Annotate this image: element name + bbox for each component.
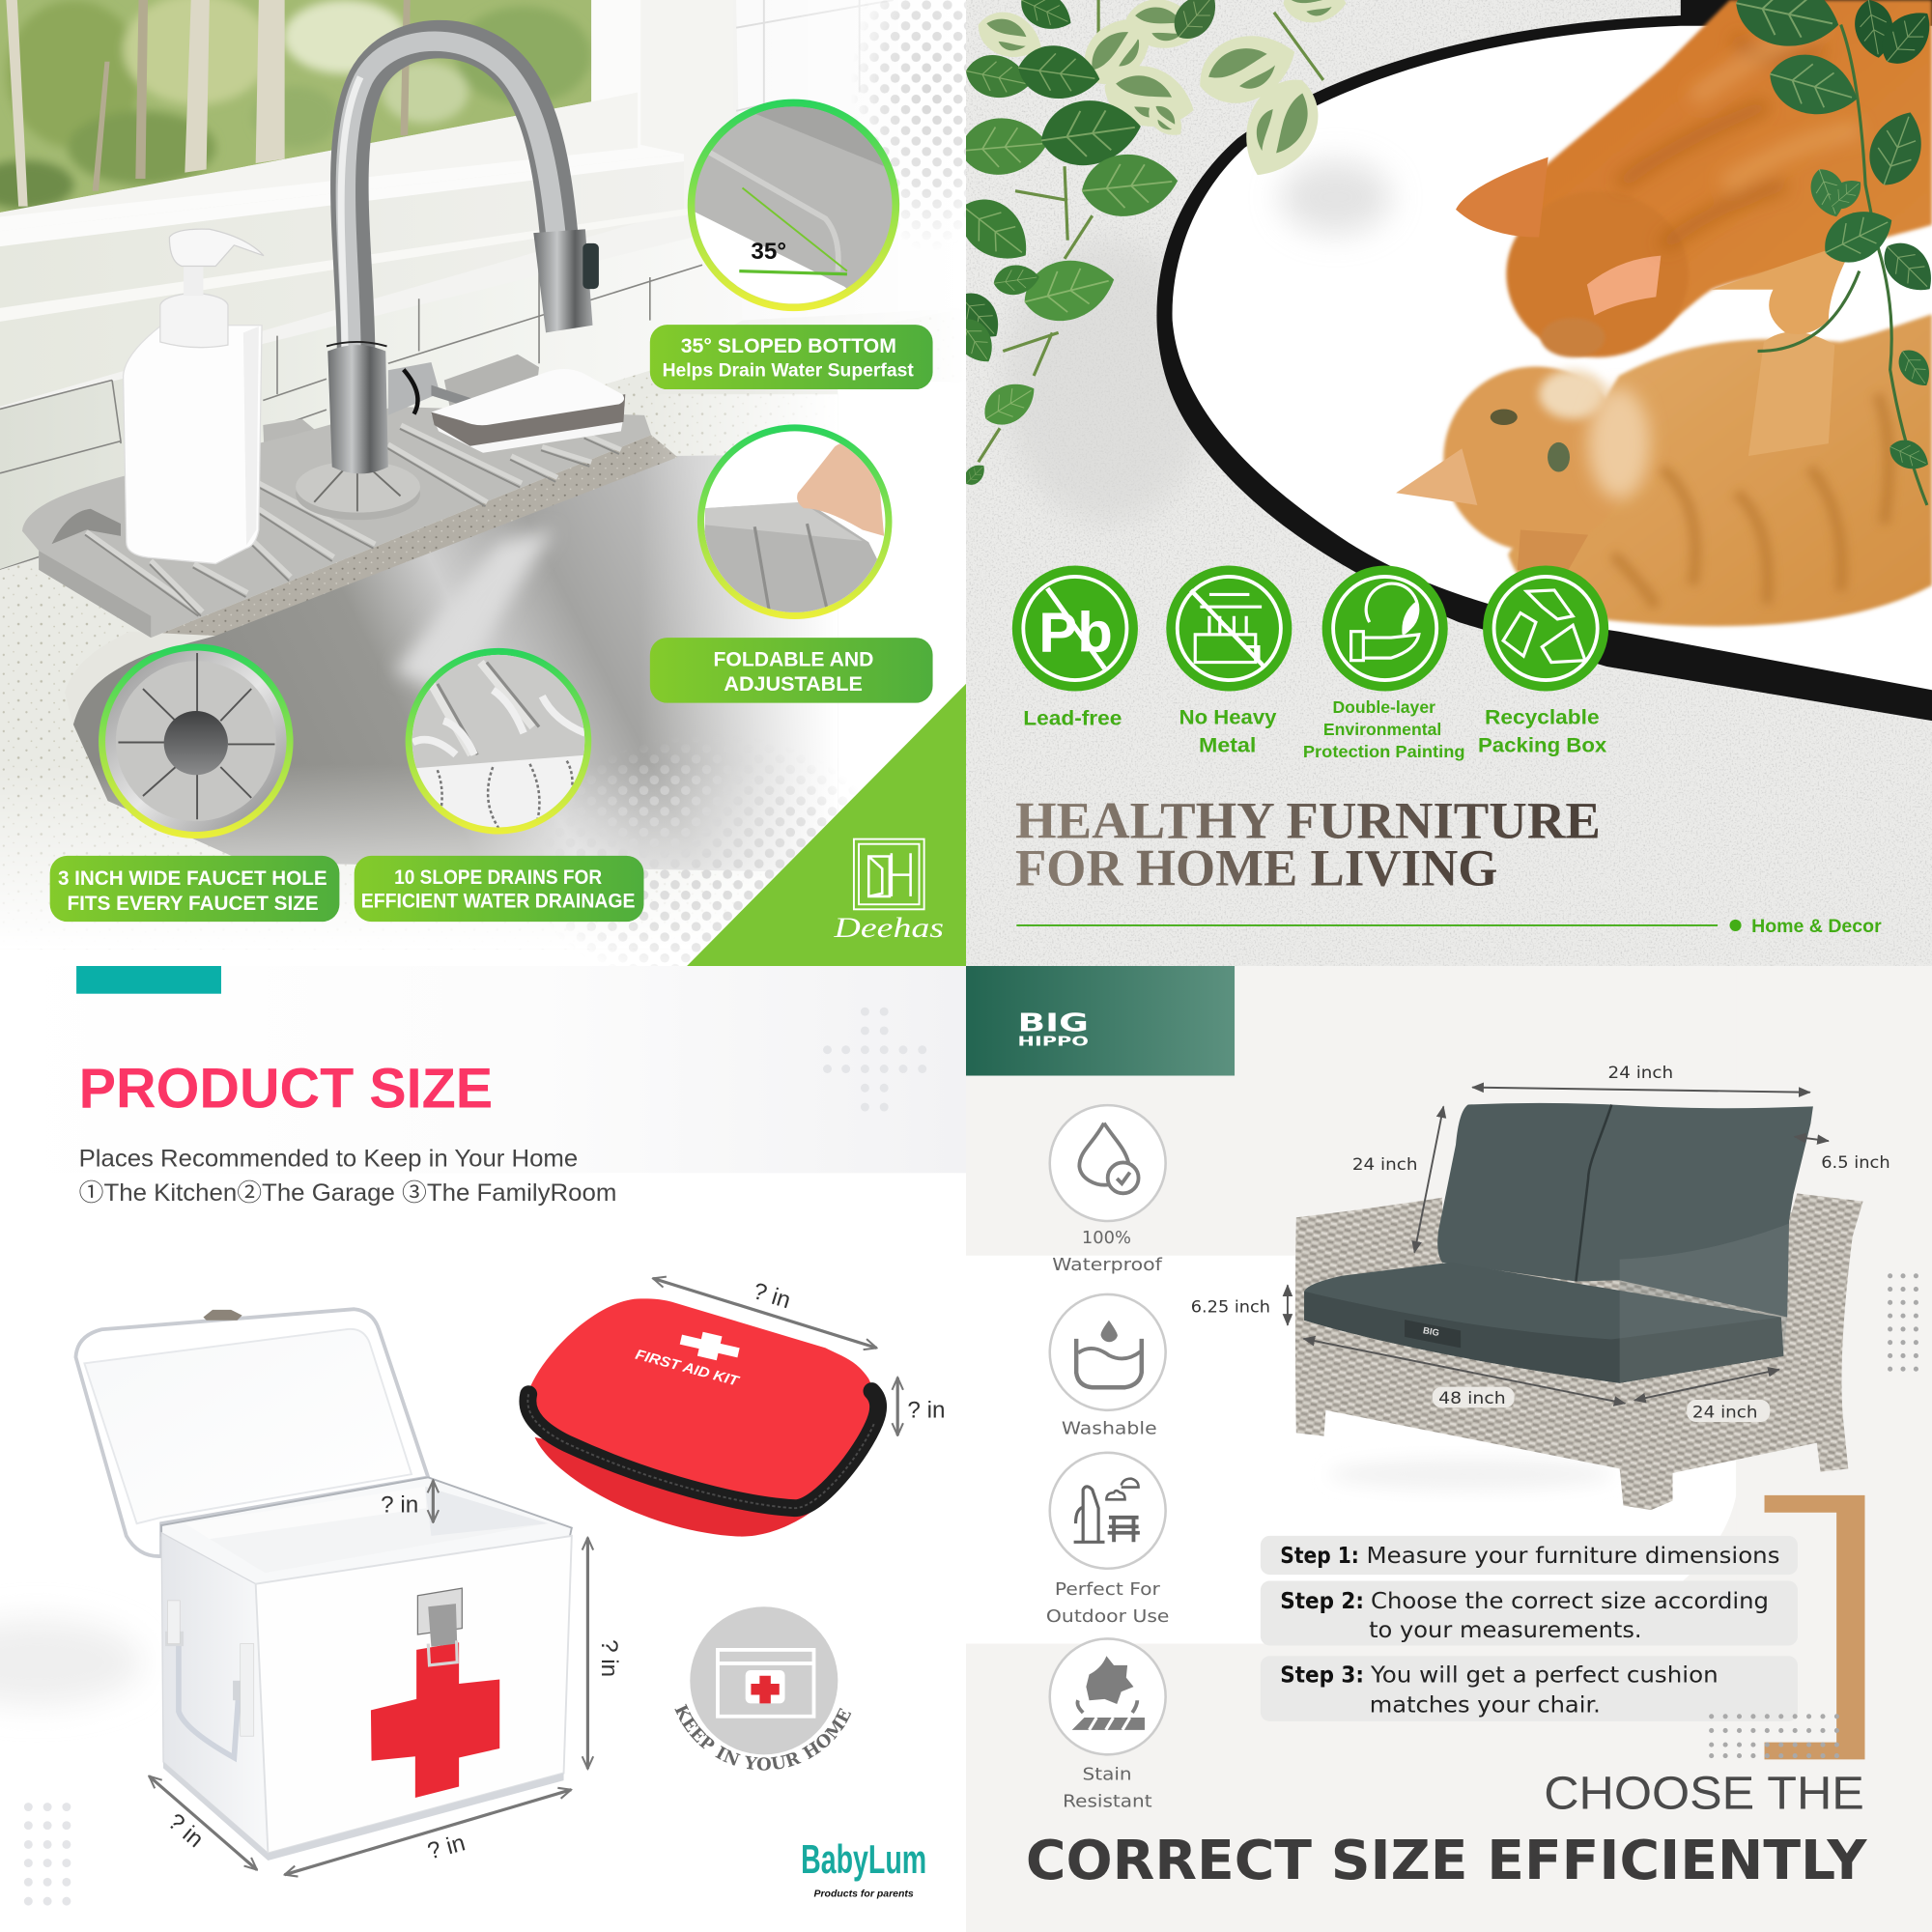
- brand header: BIG: [1018, 1009, 1089, 1038]
- orange cat: [1456, 0, 1932, 357]
- label: outdoor use: Perfect For: [1055, 1579, 1161, 1600]
- seat label: [1405, 1320, 1461, 1348]
- label: slope drains: 10 SLOPE DRAINS FOR: [394, 867, 602, 889]
- panel: big hippo cushion: [966, 966, 1932, 1932]
- accent bar: [76, 966, 221, 994]
- red cross: [371, 1642, 499, 1798]
- panel: sink mat: [0, 0, 966, 966]
- step 3: Step 3:: [1280, 1663, 1364, 1689]
- plant: left foliage: [947, 0, 1346, 489]
- label: double-layer painting: Double-layer: [1332, 697, 1435, 717]
- label: sloped bottom: 35° SLOPED BOTTOM: [681, 333, 896, 357]
- dimension labels: ? in: [907, 1397, 945, 1423]
- window view with trees: [0, 0, 591, 213]
- icon: recyclable: [1483, 565, 1608, 692]
- feature icon: waterproof: [1050, 1105, 1166, 1221]
- white metal first-aid box: [0, 1309, 572, 1861]
- sofa dimension labels: 24 inch: [1608, 1064, 1673, 1083]
- tiled wall: [0, 0, 966, 570]
- sponge: [431, 369, 625, 453]
- step 3: matches your chair.: [1370, 1692, 1601, 1718]
- logo: Deehas: [833, 839, 944, 944]
- sofa dimension labels: [1191, 1064, 1890, 1422]
- label: double-layer painting: Protection Painting: [1303, 742, 1465, 761]
- wicker sofa: [1295, 1103, 1863, 1510]
- step 1: Step 1:: [1280, 1544, 1359, 1569]
- seat cushion: [1304, 1263, 1783, 1383]
- label: foldable: FOLDABLE AND: [714, 648, 873, 670]
- title: [1015, 791, 1601, 896]
- logo: BabyLum: Products for parents: [813, 1889, 914, 1900]
- logo: BabyLum: [801, 1836, 926, 1900]
- headline: CHOOSE THE: [1544, 1767, 1864, 1819]
- label: no heavy metal: [1179, 704, 1276, 757]
- recommended places: Places Recommended to Keep in Your Home: [79, 1145, 578, 1172]
- step 2: Choose the correct size according: [1371, 1589, 1769, 1614]
- back cushion left: [1437, 1103, 1611, 1282]
- mat top: [22, 407, 651, 638]
- steel sink: [71, 435, 838, 871]
- panel: healthy furniture: [947, 0, 1932, 966]
- mat ribs: [85, 425, 621, 616]
- recommended places: ①The Kitchen②The Garage ③The FamilyRoom: [79, 1179, 616, 1207]
- label: waterproof: [1052, 1228, 1163, 1275]
- step 1: Measure your furniture dimensions: [1367, 1544, 1779, 1569]
- dimension labels: ? in: [425, 1830, 468, 1865]
- footer tag: [1016, 917, 1882, 937]
- label: outdoor use: Outdoor Use: [1046, 1606, 1169, 1627]
- sofa dimension labels: 24 inch: [1352, 1155, 1417, 1175]
- step 2: [1261, 1580, 1798, 1645]
- label: waterproof: Waterproof: [1052, 1255, 1163, 1275]
- logo: Deehas: Deehas: [833, 913, 944, 944]
- silicone mat: [22, 355, 651, 638]
- step 1: [1261, 1536, 1798, 1575]
- feature icon: outdoor use: [1050, 1453, 1166, 1569]
- dimension labels: ? in: [162, 1808, 209, 1853]
- label: recyclable packing: Recyclable: [1485, 704, 1600, 728]
- label: faucet hole: [50, 856, 339, 922]
- label: waterproof: 100%: [1082, 1228, 1131, 1248]
- headline: [1026, 1767, 1868, 1892]
- callout: slope drains: [406, 648, 591, 835]
- decorative dots: [1712, 1276, 1916, 1756]
- back cushion right: [1576, 1104, 1813, 1318]
- round mirror: [1156, 0, 1932, 721]
- brand header: HIPPO: [1018, 1035, 1089, 1049]
- label: sloped bottom: Helps Drain Water Superfast: [663, 361, 914, 382]
- label: double-layer painting: Environmental: [1323, 720, 1441, 739]
- seat label: BIG: [1422, 1325, 1440, 1339]
- step 3: [1261, 1656, 1798, 1721]
- white fades: [0, 0, 966, 966]
- label: outdoor use: [1046, 1579, 1169, 1627]
- step 2: Step 2:: [1280, 1589, 1364, 1614]
- dimension labels: ? in: [596, 1639, 622, 1677]
- badge: keep in your home: KEEP IN YOUR HOME: [674, 1704, 852, 1771]
- tan bracket: [1765, 1495, 1864, 1759]
- plant: right foliage: [1729, 0, 1932, 505]
- green corner with logo: [687, 684, 966, 966]
- icon: no heavy metal: [1166, 565, 1292, 692]
- window frame and sill: [0, 0, 591, 215]
- title: HEALTHY FURNITURE: [1015, 791, 1601, 849]
- label: lead-free: Lead-free: [1023, 706, 1122, 730]
- callout: faucet hole: [99, 643, 296, 844]
- panel: product size: [0, 966, 966, 1905]
- reflected cat: [1396, 314, 1932, 626]
- heading: PRODUCT SIZE: [79, 1058, 493, 1121]
- dimension labels: [162, 1278, 945, 1865]
- faucet base disc: [296, 469, 420, 520]
- sofa dimension labels: 24 inch: [1692, 1403, 1758, 1422]
- halftone dots: [524, 0, 966, 966]
- countertop: [0, 308, 966, 966]
- sofa dimension labels: 6.5 inch: [1821, 1153, 1890, 1173]
- feature icon: stain resistant: [1050, 1638, 1166, 1754]
- sofa dimension arrows: [1288, 1088, 1829, 1404]
- red first-aid case: FIRST AID KIT: [634, 1348, 741, 1390]
- box rim and interior: [161, 1477, 572, 1585]
- red first-aid case: [527, 1298, 878, 1537]
- label: recyclable packing: [1478, 704, 1606, 757]
- label: no heavy metal: Metal: [1199, 733, 1256, 757]
- faucet: [327, 40, 599, 473]
- footer tag: Home & Decor: [1751, 917, 1882, 937]
- box lid: [75, 1309, 428, 1556]
- label: faucet hole: 3 INCH WIDE FAUCET HOLE: [58, 867, 327, 890]
- box sides: [161, 1533, 268, 1853]
- dimension arrows: [149, 1278, 897, 1875]
- label: faucet hole: FITS EVERY FAUCET SIZE: [68, 893, 319, 915]
- feature icon: washable: [1050, 1294, 1166, 1410]
- label: no heavy metal: No Heavy: [1179, 704, 1276, 728]
- headline: CORRECT SIZE EFFICIENTLY: [1026, 1830, 1868, 1892]
- metal latch: [417, 1588, 462, 1665]
- callout: 35 degree slope: [688, 99, 899, 321]
- soap bottle: [124, 229, 264, 564]
- icon: lead-free: Pb: [1038, 602, 1113, 665]
- decorative dots: [24, 1008, 926, 1906]
- step 2: to your measurements.: [1369, 1618, 1642, 1643]
- label: sloped bottom: [650, 325, 933, 389]
- logo: BabyLum: BabyLum: [801, 1836, 926, 1882]
- translucent overlay on cushion: [1620, 1224, 1789, 1383]
- label: stain resistant: [1063, 1764, 1152, 1812]
- icon: environmental protection: [1322, 565, 1448, 692]
- callout: 35 degree slope: 35°: [751, 239, 786, 265]
- brand header: [966, 966, 1235, 1076]
- label: double-layer painting: [1303, 697, 1465, 761]
- label: recyclable packing: Packing Box: [1478, 733, 1606, 757]
- label: slope drains: EFFICIENT WATER DRAINAGE: [361, 890, 636, 912]
- sofa dimension labels: 48 inch: [1438, 1389, 1506, 1408]
- label: foldable: [650, 638, 933, 703]
- case emblem: [678, 1327, 741, 1365]
- callout: foldable: [697, 424, 892, 625]
- dimension labels: ? in: [381, 1492, 418, 1519]
- wicker frame: [1295, 1193, 1863, 1510]
- label: foldable: ADJUSTABLE: [724, 673, 863, 696]
- counter edge: [151, 435, 678, 638]
- label: washable: Washable: [1062, 1419, 1157, 1439]
- badge: keep in your home: [674, 1606, 852, 1771]
- sofa dimension labels: 6.25 inch: [1191, 1297, 1270, 1317]
- box handle: [179, 1640, 239, 1758]
- label: stain resistant: Stain: [1083, 1764, 1132, 1784]
- recommended places: [79, 1145, 616, 1207]
- title: FOR HOME LIVING: [1015, 838, 1497, 896]
- label: stain resistant: Resistant: [1063, 1792, 1152, 1812]
- icon: lead-free: [1012, 565, 1138, 692]
- back flap: [444, 355, 539, 407]
- dimension labels: ? in: [750, 1278, 794, 1314]
- step 3: You will get a perfect cushion: [1370, 1663, 1719, 1689]
- label: slope drains: [355, 856, 643, 922]
